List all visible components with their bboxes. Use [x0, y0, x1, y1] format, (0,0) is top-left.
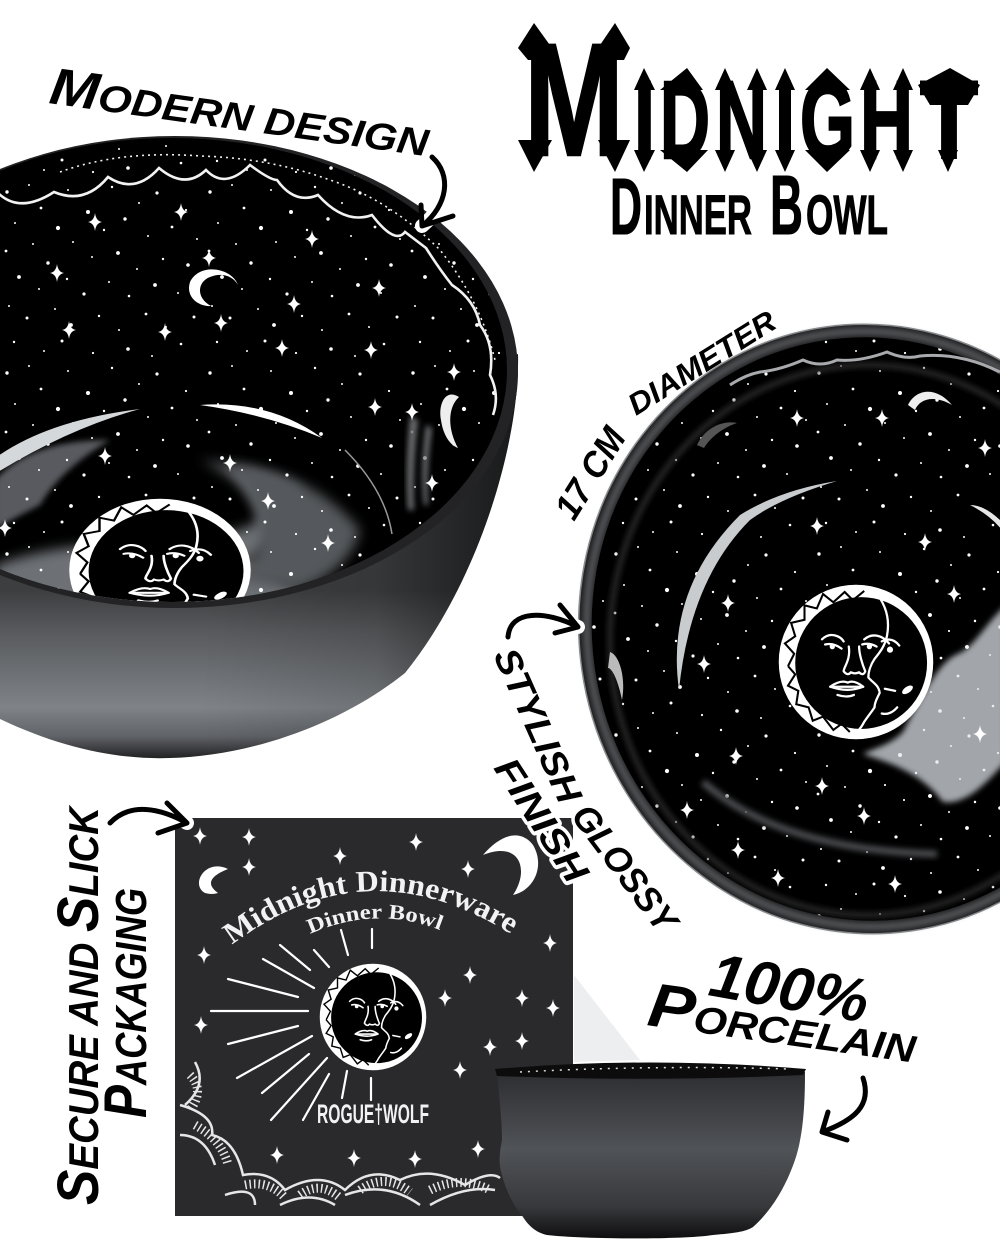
big bowl outer body [0, 354, 518, 758]
title word Midnight: I [634, 59, 655, 182]
moon illustration in big bowl [69, 498, 251, 602]
arrow: modern design [421, 157, 453, 226]
box title arc: Dinner Bowl [305, 904, 444, 934]
title word Midnight: M [524, 10, 624, 189]
label: 100% porcelain: PORCELAIN [644, 971, 923, 1077]
packaging box [175, 818, 640, 1216]
cloud border on big bowl [0, 155, 496, 415]
icon: side crescent on wall [440, 394, 459, 448]
icon: crescent moon on wall [189, 269, 238, 306]
title word Midnight: N [716, 59, 767, 182]
label: 17 cm diameter: 17 CM [546, 419, 634, 526]
title words Dinner Bowl: B [770, 158, 803, 252]
big bowl rim [0, 136, 518, 608]
second bowl photo (top-down) [578, 323, 1000, 934]
small bowl photo [495, 1062, 806, 1238]
second bowl stars [680, 409, 992, 893]
arrow: stylish finish [508, 605, 578, 637]
label: secure and slick packaging: PACKAGING [92, 888, 159, 1118]
label: 17 cm diameter [546, 305, 782, 526]
floor edge highlight [677, 481, 837, 690]
small bowl rim [495, 1062, 806, 1079]
title words Dinner Bowl: INNER [644, 183, 752, 246]
box title arc: Midnight Dinnerware [221, 870, 516, 944]
label: stylish glossy finish [486, 642, 688, 942]
second bowl interior [592, 337, 1000, 921]
label: stylish glossy finish: FINISH [486, 750, 598, 891]
big bowl floor [0, 436, 392, 602]
box clouds [180, 1062, 500, 1205]
label: secure and slick packaging: SECURE AND SLICK [46, 805, 111, 1205]
icon: dim crescent on second bowl wall [697, 422, 737, 448]
icon: side crescent on second bowl wall [608, 652, 623, 700]
label: 100% porcelain: 100% [705, 941, 874, 1037]
label: stylish glossy finish: STYLISH [486, 642, 591, 810]
title word Midnight: G [800, 59, 855, 182]
big bowl floor highlights [200, 404, 322, 438]
title word Midnight: T [920, 59, 978, 182]
label: stylish glossy finish: GLOSSY [564, 796, 688, 942]
box body [175, 818, 573, 1216]
shadow wedge behind box [574, 975, 640, 1062]
label: secure and slick packaging [46, 805, 159, 1205]
box crescent left [199, 866, 228, 894]
second bowl floor [673, 480, 1000, 840]
title word Midnight: D [660, 59, 710, 182]
second bowl outer wall [539, 287, 1000, 971]
big bowl photo [0, 130, 520, 758]
title [518, 10, 980, 252]
glare highlights [863, 606, 1000, 802]
box moon [320, 964, 426, 1070]
box crescent right [483, 835, 538, 895]
second bowl rim bands [539, 287, 1000, 971]
big bowl interior [0, 138, 507, 602]
box brand: ROGUE†WOLF [317, 1099, 429, 1129]
label: 17 cm diameter: DIAMETER [622, 305, 782, 422]
title word Midnight: H [860, 59, 913, 182]
label: modern design: MODERN DESIGN [46, 57, 434, 168]
icon: crescent on second bowl wall [908, 392, 952, 410]
cloud border on second bowl [730, 352, 1000, 385]
box sun rays [211, 929, 372, 1120]
label: 100% porcelain [644, 941, 923, 1077]
arrow: packaging [110, 803, 187, 833]
big bowl stars [0, 203, 461, 552]
title words Dinner Bowl: OWL [806, 183, 888, 246]
title word Midnight: I [775, 59, 795, 182]
arrow: porcelain [822, 1078, 865, 1140]
box stars [193, 827, 560, 1168]
small bowl body [497, 1072, 805, 1238]
moon illustration in second bowl [779, 585, 933, 739]
title words Dinner Bowl: D [610, 162, 642, 251]
